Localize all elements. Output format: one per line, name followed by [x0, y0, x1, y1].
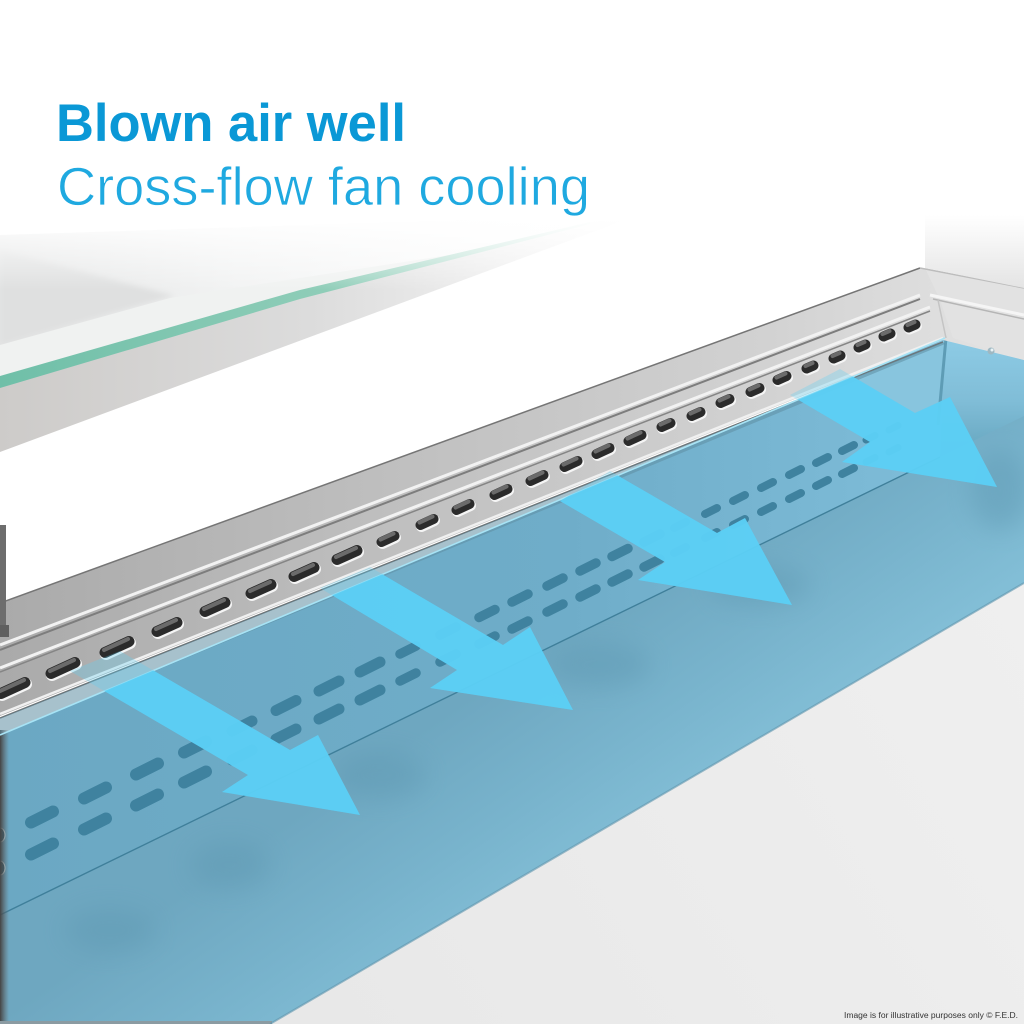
steel beam under glass [0, 220, 625, 452]
airflow arrows [70, 369, 997, 815]
rail corner right return [925, 268, 1024, 360]
floor smudges [65, 450, 1024, 952]
bottom dark edge [0, 1021, 272, 1024]
blue air well [0, 330, 1024, 1024]
light line along top of well [0, 338, 945, 735]
perforations at far left edge [0, 828, 5, 875]
stainless steel air rail [0, 268, 1024, 735]
arrow 1 [70, 651, 360, 815]
rear interior panels [0, 215, 620, 385]
panel end lighter section [850, 340, 945, 420]
top right pale wall [925, 215, 1024, 288]
display case rear: glass shelf and beam [0, 215, 625, 452]
well right wall [930, 330, 1024, 470]
fold line between panel and floor [0, 457, 940, 915]
left dark edge [0, 730, 9, 1024]
well floor [0, 416, 1024, 1024]
rail ridges [0, 268, 1024, 718]
top white fade [0, 215, 700, 290]
well lower lip shadow [270, 583, 1024, 1024]
green glass edge [0, 222, 590, 388]
subtitle: Cross-flow fan cooling [57, 157, 590, 217]
perforated back panel [0, 338, 945, 915]
panel perforations [31, 426, 898, 854]
arrow 3 [560, 471, 792, 605]
rail slot highlights [2, 326, 916, 695]
rail shadow under lip [0, 342, 945, 735]
disclaimer: Image is for illustrative purposes only © F.E.D. [844, 1011, 1018, 1020]
right wall screw [988, 348, 994, 354]
arrow 4 [790, 369, 997, 487]
rail body [0, 268, 1024, 716]
title: Blown air well [56, 94, 406, 153]
corner seam [938, 338, 946, 425]
left glass support post [0, 525, 9, 637]
arrow 2 [320, 567, 573, 710]
white floor of the case [270, 583, 1024, 1024]
slot inner sheen [0, 322, 914, 691]
rail slots [1, 324, 916, 694]
